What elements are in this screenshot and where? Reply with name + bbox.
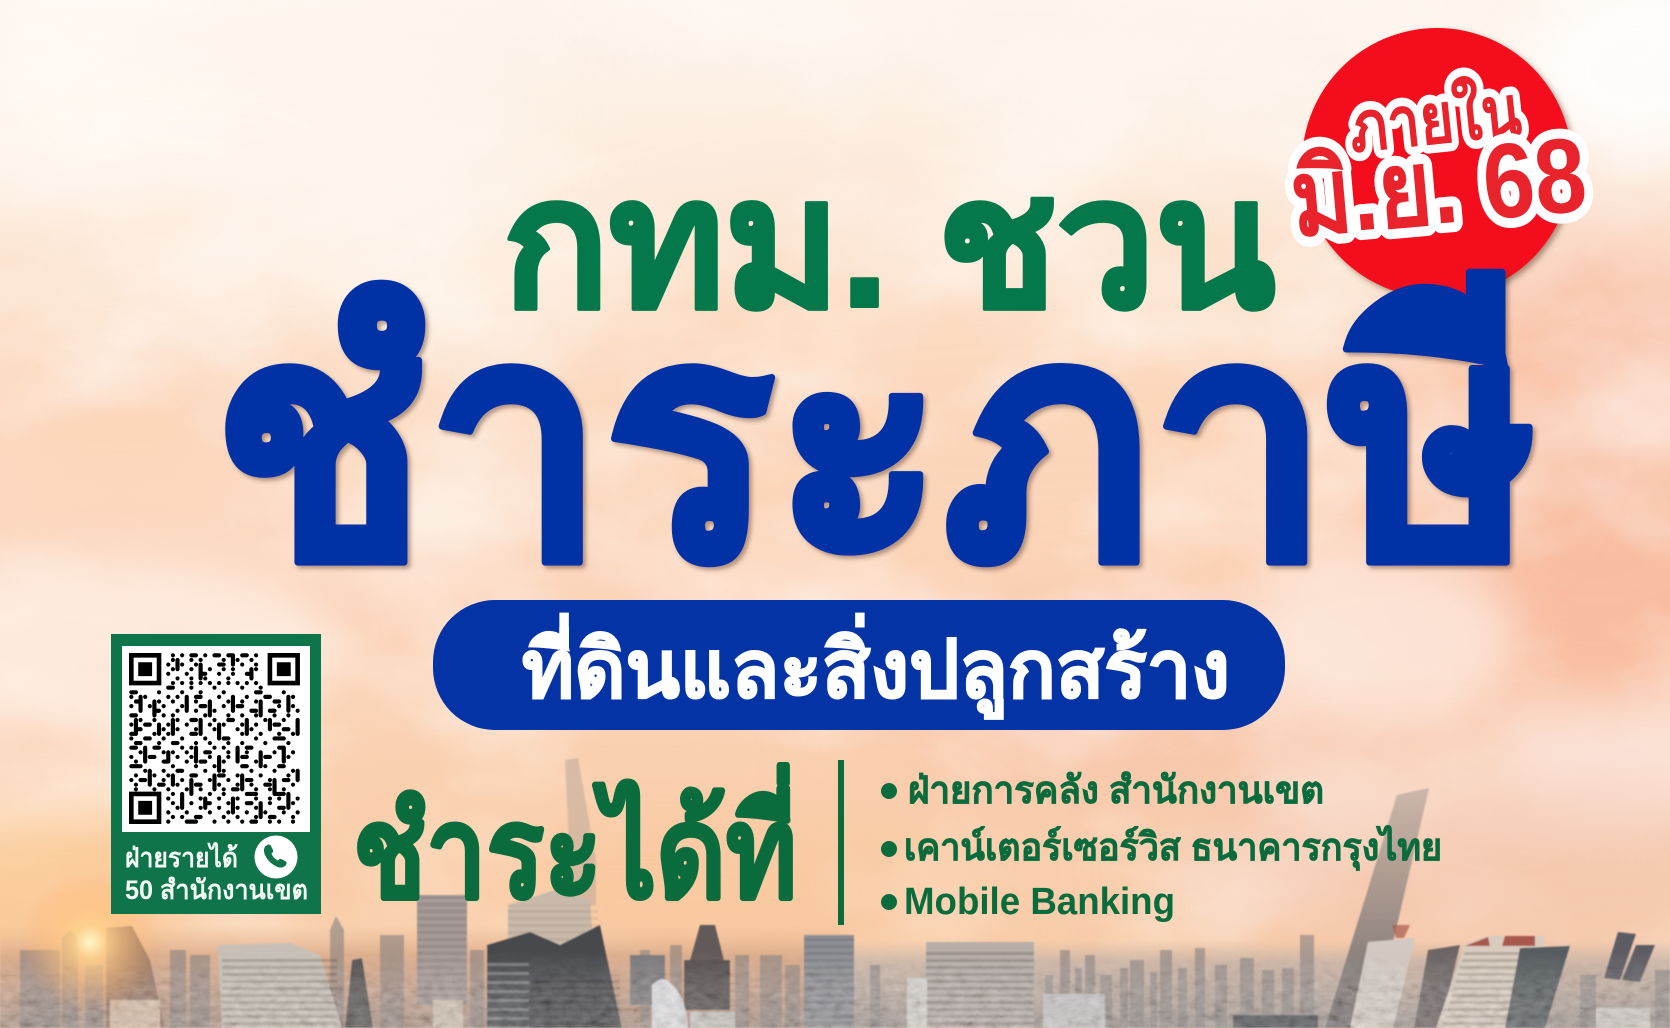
far small towers (20, 916, 1670, 1028)
badge text: ภายใน มิ.ย. 68 (1286, 69, 1591, 259)
pale tilted tower (1350, 938, 1415, 1028)
sun glow (20, 872, 160, 1012)
left haze city band (0, 925, 840, 1028)
icon: phone (254, 836, 298, 878)
dark tilted tower (1414, 945, 1460, 1028)
payment channel list (881, 770, 1442, 923)
brown tower left (106, 926, 165, 1028)
grey tower at middle (804, 935, 854, 1028)
title: กทม. ชวน: กทม. ชวน (503, 144, 1275, 345)
faint tall tower behind heading (565, 758, 596, 905)
light tower behind (508, 890, 600, 1028)
QR caption: ฝ่ายรายได้: ฝ่ายรายได้ (125, 842, 238, 873)
tilted tall tower (1325, 788, 1429, 1028)
far right dark towers (1604, 932, 1636, 980)
light office block (218, 943, 342, 1028)
dark small tower (345, 958, 373, 1028)
channel 2: เคาน์เตอร์เซอร์วิส ธนาคารกรุงไทย (904, 825, 1442, 871)
dark glass tower (487, 925, 622, 1028)
right haze city band (835, 940, 1670, 1028)
twin cream towers (1436, 936, 1545, 1028)
pill: ที่ดินและสิ่งปลูกสร้าง (433, 600, 1285, 730)
pill text: ที่ดินและสิ่งปลูกสร้าง (522, 613, 1230, 720)
curved white tower (652, 979, 688, 1028)
tall beige tower (417, 895, 467, 1005)
dark office right of centre (684, 960, 730, 1010)
city skyline photo area (0, 758, 1670, 1028)
QR caption: 50 สำนักงานเขต: 50 สำนักงานเขต (125, 875, 308, 905)
badge line: มิ.ย. 68: มิ.ย. 68 (1286, 116, 1591, 259)
heading: ชำระได้ที่: ชำระได้ที่ (353, 763, 797, 925)
channel 3: Mobile Banking (904, 881, 1175, 923)
QR card (111, 634, 321, 914)
dark green tower (1505, 946, 1570, 1028)
headline: ชำระภาษี: ชำระภาษี (213, 258, 1537, 627)
badge line: ภายใน: ภายใน (1345, 69, 1525, 167)
red badge circle (1302, 28, 1572, 298)
divider (838, 760, 844, 925)
city texture (0, 958, 1670, 1028)
QR code (131, 655, 298, 822)
channel 1: ฝ่ายการคลัง สำนักงานเขต (908, 770, 1324, 812)
pale office block (926, 942, 1034, 1028)
